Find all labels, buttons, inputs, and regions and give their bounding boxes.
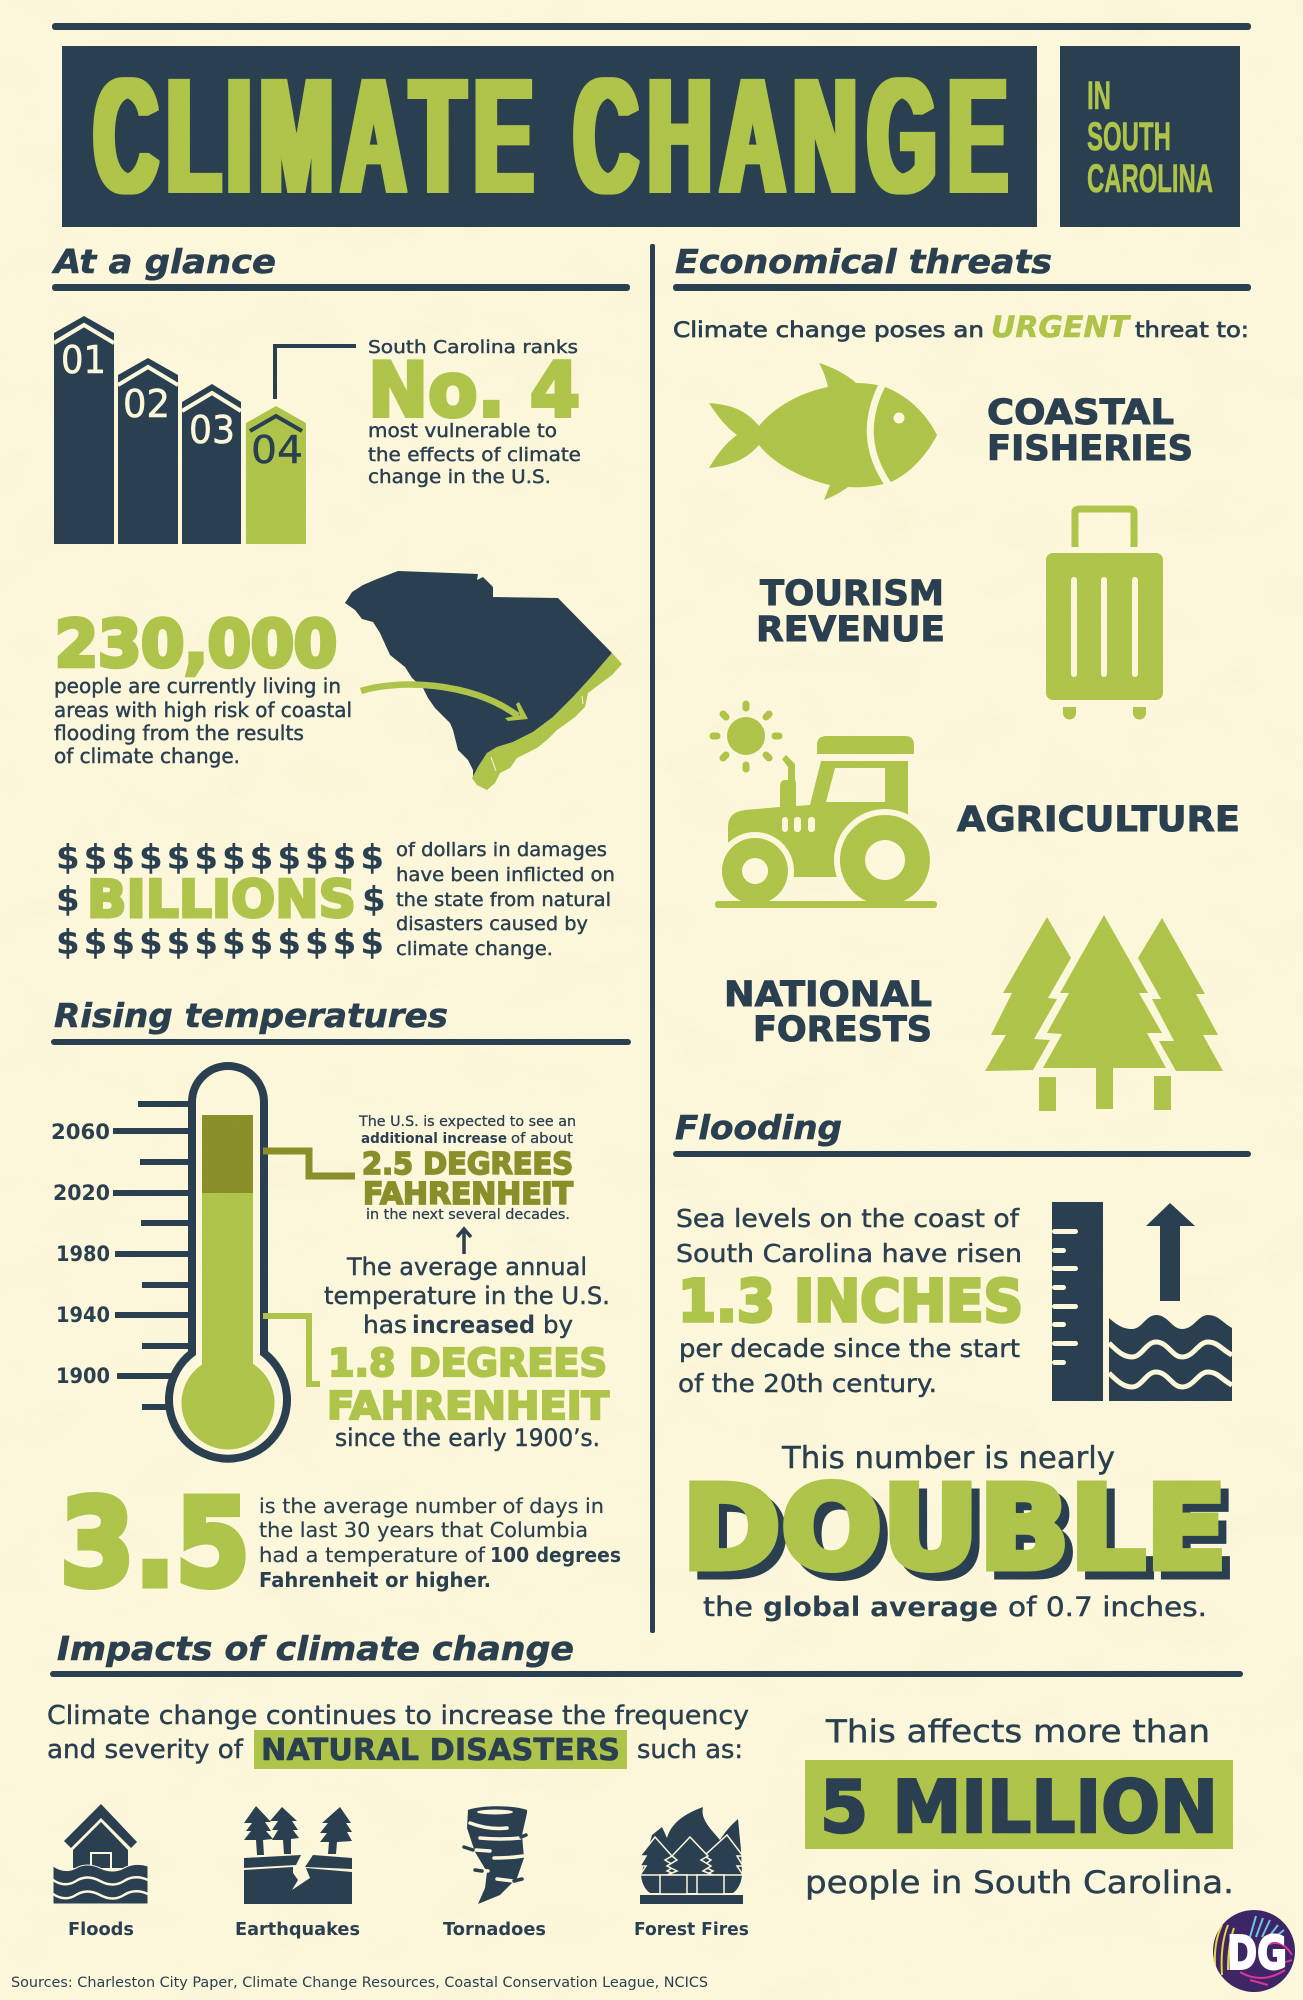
text: nearly double: This number is nearly: [781, 1441, 1115, 1476]
panel: rising temperatures: [51, 996, 631, 1614]
callout: 5 million: 5 MILLION: [820, 1765, 1218, 1849]
header banner: [62, 44, 1240, 227]
icon: sea level ruler and water: [1052, 1202, 1232, 1401]
disaster labels: [68, 1919, 749, 1940]
sea level text: [676, 1204, 1023, 1398]
callout: 5 million: This affects more than: [825, 1714, 1210, 1750]
stat: 230,000: areas with high risk of coastal: [54, 698, 352, 722]
top rule: [52, 23, 1251, 30]
label: tourism revenue: [756, 574, 945, 650]
label: coastal fisheries: [987, 393, 1193, 469]
disaster labels: Forest Fires: [634, 1919, 749, 1940]
panel: flooding: [673, 1108, 1251, 1623]
callout: 2.5 degrees: additional increase: [361, 1131, 507, 1147]
heading: flooding: Flooding: [675, 1108, 842, 1147]
heading: rising temperatures: [51, 996, 631, 1045]
ranking bars: 04: [251, 428, 303, 472]
stat: billions: $: [362, 880, 386, 920]
logo: DG: DG: [1227, 1926, 1287, 1980]
ranking text: most vulnerable to: [368, 420, 557, 442]
ranking bars: [54, 316, 306, 544]
callout: 1.8 degrees: [324, 1253, 610, 1452]
label: coastal fisheries: FISHERIES: [987, 429, 1193, 469]
icon: fish: [709, 363, 937, 500]
ranking text: the effects of climate: [368, 444, 581, 466]
intro text: NATURAL DISASTERS: [261, 1733, 620, 1768]
stat: 230,000: people are currently living in: [54, 674, 341, 698]
urgent threat line: URGENT: [991, 310, 1131, 344]
map: south carolina: [345, 571, 622, 790]
stat: billions: have been inflicted on: [396, 864, 615, 886]
subtitle panel: CAROLINA: [1087, 157, 1213, 201]
callout: 2.5 degrees: [358, 1114, 576, 1223]
chart: thermometer: 1980: [56, 1242, 110, 1266]
stat: billions: of dollars in damages: [396, 839, 607, 861]
label: agriculture: AGRICULTURE: [957, 800, 1240, 840]
stat: billions: climate change.: [396, 938, 553, 960]
stat: 3.5 days: [60, 1475, 621, 1614]
chart: thermometer: 2060: [51, 1120, 110, 1144]
sea level text: Sea levels on the coast of: [676, 1204, 1020, 1233]
callout: 1.8 degrees: increased: [412, 1311, 535, 1339]
callout: 2.5 degrees: of about: [511, 1131, 574, 1147]
column divider: [650, 244, 655, 1633]
label: national forests: FORESTS: [753, 1010, 932, 1050]
ranking bars: 01: [61, 338, 106, 382]
heading: flooding: [673, 1108, 1251, 1157]
heading: rising temperatures: Rising temperatures: [54, 996, 448, 1035]
heading: at a glance: [51, 242, 630, 291]
stat: 3.5 days: the last 30 years that Columbia: [259, 1518, 588, 1542]
stat: billions: $$$$$$$$$$$$: [56, 923, 384, 963]
stat: billions: the state from natural: [396, 889, 611, 911]
stat: 230,000: of climate change.: [54, 744, 240, 768]
stat: billions: BILLIONS: [87, 870, 356, 930]
callout: 1.8 degrees: by: [543, 1311, 573, 1339]
title: climate change: CLIMATE CHANGE: [94, 44, 1007, 227]
heading: at a glance: At a glance: [51, 242, 276, 281]
ranking bars: 02: [123, 382, 170, 426]
panel: economical threats: [673, 242, 1251, 1111]
icon: suitcase: [1046, 509, 1163, 720]
connector: projected increase: [263, 1151, 355, 1176]
icon: forest fires: [640, 1807, 743, 1904]
label: tourism revenue: TOURISM: [760, 574, 944, 614]
disaster labels: Floods: [68, 1919, 134, 1940]
ranking text: [368, 337, 581, 488]
ranking text: South Carolina ranks: [368, 337, 578, 358]
chart: thermometer: 1940: [56, 1303, 110, 1327]
arrow: up: [457, 1229, 471, 1254]
intro text: Climate change continues to increase the frequency: [47, 1701, 749, 1731]
sea level text: per decade since the start: [679, 1334, 1020, 1363]
callout: 1.8 degrees: since the early 1900’s.: [335, 1424, 600, 1452]
callout: 5 million: [805, 1714, 1234, 1901]
icon: earthquakes: [244, 1806, 352, 1904]
subtitle panel: IN: [1087, 74, 1111, 118]
callout: 2.5 degrees: 2.5 DEGREES: [362, 1147, 573, 1182]
label: national forests: [724, 975, 932, 1050]
callout: 2.5 degrees: in the next several decades.: [366, 1207, 570, 1223]
callout: 2.5 degrees: The U.S. is expected to see an: [358, 1114, 576, 1130]
label: tourism revenue: REVENUE: [756, 610, 945, 650]
urgent threat line: Climate change poses an: [673, 318, 984, 342]
chart: thermometer: 2020: [53, 1181, 110, 1205]
callout: 1.8 degrees: 1.8 DEGREES: [328, 1341, 607, 1385]
stat: 3.5 days: 3.5: [60, 1475, 250, 1614]
ranking text: change in the U.S.: [368, 466, 551, 488]
callout: 1.8 degrees: The average annual: [346, 1253, 587, 1281]
callout: 1.8 degrees: has: [363, 1311, 407, 1339]
icon: pine trees: [985, 915, 1223, 1111]
stat: 3.5 days: 100 degrees: [490, 1543, 621, 1567]
label: coastal fisheries: COASTAL: [987, 393, 1174, 433]
subtitle panel: [1060, 46, 1240, 227]
panel: impacts of climate change: [47, 1629, 1243, 1940]
icon: tractor and sun: [713, 704, 937, 911]
stat: 230,000: flooding from the results: [54, 721, 304, 745]
disaster labels: Earthquakes: [235, 1919, 360, 1940]
intro text: such as:: [637, 1735, 743, 1765]
callout: 1.8 degrees: FAHRENHEIT: [327, 1384, 609, 1428]
sea level text: 1.3 INCHES: [678, 1267, 1023, 1335]
stat: 3.5 days: had a temperature of: [259, 1543, 486, 1567]
ranking bars: 03: [189, 408, 235, 452]
urgent threat line: threat to:: [1135, 318, 1249, 342]
label: national forests: NATIONAL: [724, 975, 932, 1015]
callout: 2.5 degrees: FAHRENHEIT: [363, 1177, 574, 1212]
chart: thermometer: 1900: [56, 1364, 110, 1388]
heading: impacts of climate change: [50, 1629, 1243, 1677]
sources: Sources: Charleston City Paper, Climate Change Resources, Coastal Conservation League, NCICS: [11, 1975, 708, 1991]
disaster labels: Tornadoes: [443, 1919, 546, 1940]
heading: economical threats: Economical threats: [675, 242, 1052, 281]
text: nearly double: of 0.7 inches.: [1008, 1592, 1207, 1623]
heading: economical threats: [673, 242, 1251, 291]
text: nearly double: DOUBLE: [682, 1462, 1227, 1596]
subtitle panel: SOUTH: [1087, 115, 1171, 159]
panel: at a glance: [51, 242, 630, 963]
intro text: and severity of: [47, 1735, 244, 1765]
connector line: [275, 346, 356, 399]
text: nearly double: global average: [763, 1592, 998, 1623]
heading: impacts of climate change: Impacts of climate change: [57, 1629, 574, 1668]
ranking text: No. 4: [368, 346, 580, 434]
stat: 230,000: [54, 608, 352, 768]
icon: floods: [53, 1804, 148, 1904]
sea level text: of the 20th century.: [678, 1369, 937, 1398]
callout: 1.8 degrees: temperature in the U.S.: [324, 1282, 610, 1310]
stat: billions: $$$$$$$$$$$$: [56, 838, 384, 878]
stat: 3.5 days: Fahrenheit or higher.: [259, 1568, 491, 1592]
icon: tornadoes: [464, 1806, 527, 1904]
stat: 230,000: 230,000: [55, 608, 337, 682]
intro text: [47, 1701, 749, 1769]
stat: 3.5 days: is the average number of days in: [259, 1494, 604, 1518]
stat: billions: $: [56, 880, 80, 920]
sea level text: South Carolina have risen: [676, 1239, 1022, 1268]
stat: billions: disasters caused by: [396, 913, 588, 935]
stat: billions: [56, 838, 615, 963]
text: nearly double: the: [703, 1592, 753, 1623]
callout: 5 million: people in South Carolina.: [805, 1865, 1234, 1901]
urgent threat line: [673, 310, 1249, 344]
connector: historic increase: [263, 1316, 320, 1384]
logo: DG: [1213, 1910, 1295, 1992]
title panel: [62, 46, 1037, 227]
text: nearly double: DOUBLE: [690, 1470, 1235, 1604]
chart: thermometer: [51, 1066, 287, 1459]
